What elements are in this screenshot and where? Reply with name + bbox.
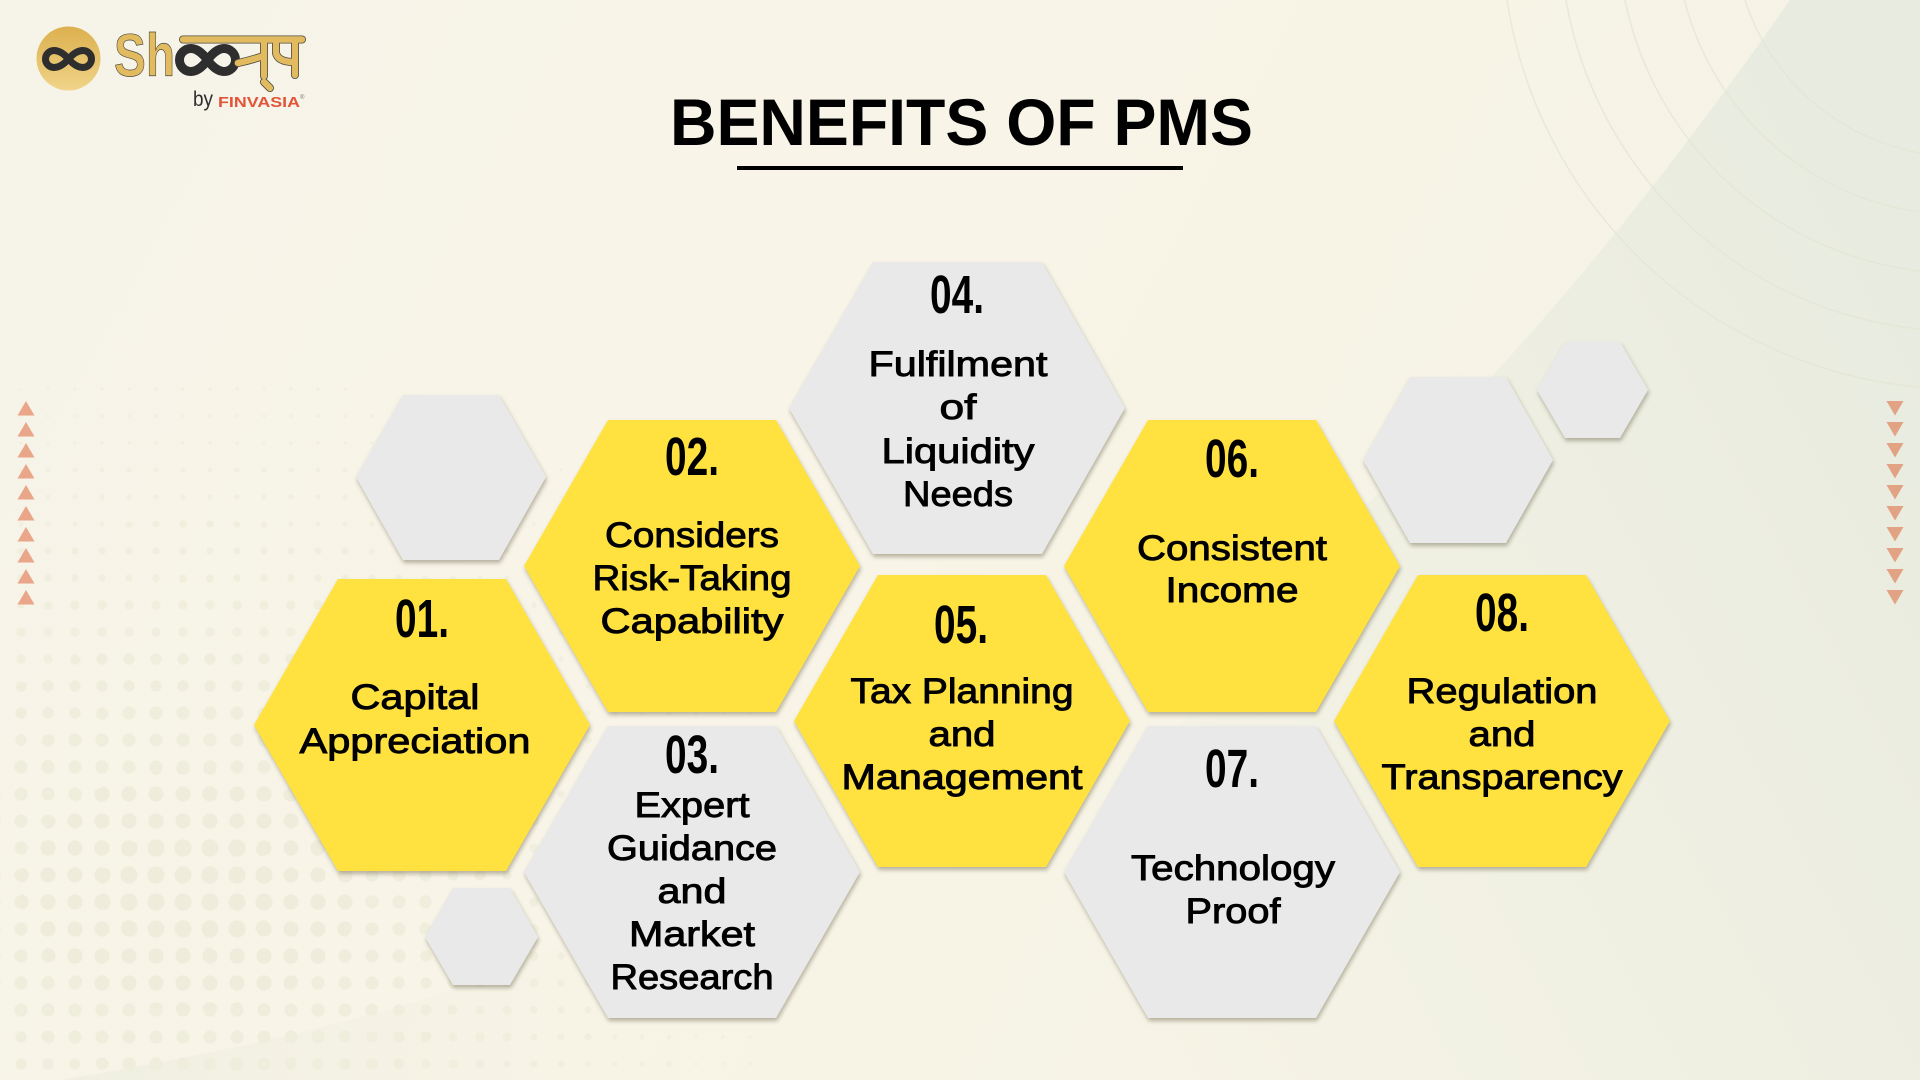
hexagon 08: Regulation and Transparency [1334,575,1670,867]
number 01: 01. [395,589,449,649]
label 07 [1131,849,1336,931]
label 06: Income [1166,571,1298,610]
label 01 [300,678,530,761]
number 02: 02. [665,427,719,487]
left triangle column [18,401,34,604]
decorative hexagon: right [1363,377,1553,543]
decorative hexagon: small upper right [1537,342,1648,438]
label 06 [1137,529,1327,610]
hexagon 07: Technology Proof [1064,726,1400,1018]
label 04: Liquidity [882,432,1035,471]
hexagon 04: Fulfilment of Liquidity Needs [789,262,1125,554]
label 05: Management [842,758,1083,797]
number 04: 04. [930,265,984,325]
label 07: Proof [1186,892,1281,931]
logo byline [193,88,305,111]
label 08 [1382,672,1623,797]
hexagon 03: Expert Guidance and Market Research [524,725,860,1018]
logo byline: FINVASIA [218,94,300,111]
label 03: Expert [634,786,750,825]
label 05: Tax Planning [850,672,1074,711]
label 04: Fulfilment [868,345,1048,384]
label 03: Market [629,915,755,954]
label 04 [868,345,1048,514]
logo byline: ® [300,94,305,101]
label 02: Considers [605,516,779,555]
label 02 [592,516,792,641]
right triangle column [1886,401,1904,604]
hexagon 01: Capital Appreciation [254,579,590,871]
label 05 [842,672,1083,797]
logo byline: by [193,88,213,111]
label 07: Technology [1131,849,1336,888]
label 02: Capability [600,602,784,641]
label 08: Transparency [1382,758,1623,797]
hexagon 02: Considers Risk-Taking Capability [524,420,860,712]
label 03: and [658,872,726,911]
label 03: Guidance [607,829,777,868]
title: BENEFITS OF PMS [670,85,1253,159]
number 05: 05. [934,595,988,655]
label 06: Consistent [1137,529,1327,568]
number 07: 07. [1205,739,1259,799]
number 06: 06. [1205,429,1259,489]
label 01: Capital [350,678,480,717]
label 08: Regulation [1406,672,1598,711]
decorative hexagon: upper left [356,395,546,560]
icon: gold circle with infinity mark [36,26,100,90]
label 02: Risk-Taking [592,559,792,598]
number 03: 03. [665,725,719,785]
label 03 [607,786,777,997]
hexagon 06: Consistent Income [1064,420,1400,712]
number 08: 08. [1475,583,1529,643]
decorative hexagon: small lower left [425,888,538,985]
label 08: and [1468,715,1536,754]
logo: Shoonya by Finvasia [36,22,305,111]
label 03: Research [610,958,774,997]
label 01: Appreciation [300,722,530,761]
hexagon 05: Tax Planning and Management [794,575,1130,867]
logo wordmark [114,22,302,89]
label 05: and [928,715,996,754]
logo wordmark: Sh [114,22,175,89]
label 04: Needs [903,475,1013,514]
label 04: of [940,388,977,427]
